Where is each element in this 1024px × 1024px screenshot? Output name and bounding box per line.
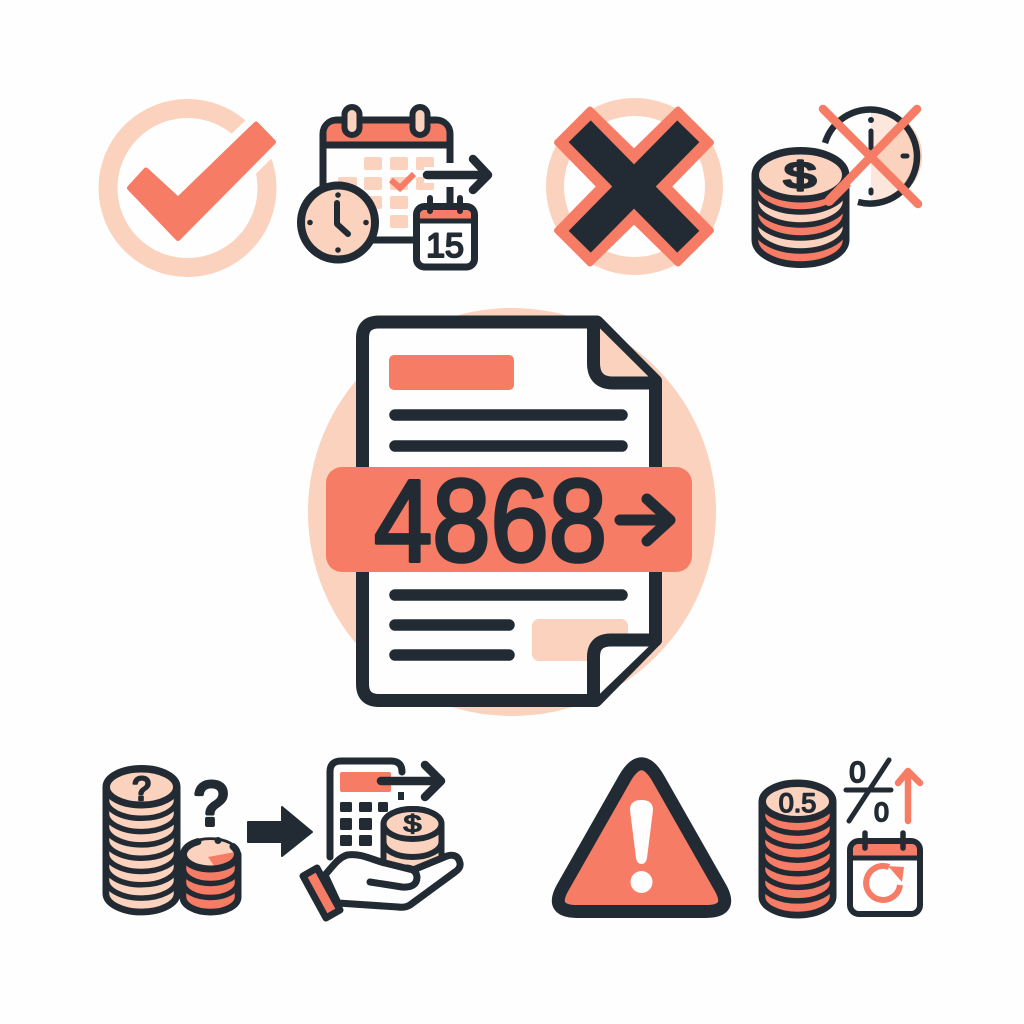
pale signature box xyxy=(532,619,628,661)
icon: calendar with clock and due date xyxy=(301,107,488,267)
document title bar xyxy=(389,355,514,390)
coin stack with dollar xyxy=(756,151,846,264)
icon: percent sign: 0 xyxy=(874,797,889,827)
coin stack with dollar: $ xyxy=(784,155,816,196)
central panel: form 4868 document xyxy=(308,308,716,716)
icon: calculator, coins and open hand xyxy=(303,761,460,918)
small calendar showing 15 xyxy=(416,198,474,267)
arrow pointing right xyxy=(424,159,488,190)
open hand xyxy=(325,855,460,907)
coral cuff xyxy=(303,868,340,918)
icon: calendar with refresh symbol xyxy=(850,833,920,914)
hand-held coins xyxy=(384,809,442,875)
short coin stack xyxy=(183,837,238,912)
lower text lines xyxy=(395,595,622,655)
document page xyxy=(362,322,656,700)
icon: percent sign: 0 xyxy=(849,757,866,789)
bottom page fold xyxy=(594,640,656,700)
tall coin stack: ? xyxy=(132,770,151,807)
icon: 0.5 percent coin stack xyxy=(762,784,832,914)
pale background circle xyxy=(308,308,716,716)
upper text lines xyxy=(395,415,622,446)
band arrow xyxy=(620,499,670,541)
icon: X mark in ring xyxy=(555,107,714,266)
date number: 15 xyxy=(426,227,464,265)
form number: 4868 xyxy=(374,455,607,586)
exclamation mark xyxy=(630,800,653,893)
icon: coins and crossed-out clock xyxy=(756,109,922,264)
icon: check mark in ring xyxy=(108,108,274,268)
calculator xyxy=(330,761,441,857)
hand-held coins: $ xyxy=(404,811,422,838)
icon: percent sign xyxy=(846,757,891,827)
crossed clock xyxy=(825,110,922,204)
clock xyxy=(301,186,375,260)
cross strokes xyxy=(823,109,918,206)
coral number band xyxy=(326,467,692,572)
arrow: rising rate xyxy=(898,771,920,821)
icon: warning triangle xyxy=(558,764,725,912)
icon: unknown coin stacks xyxy=(106,769,238,912)
tall coin stack xyxy=(106,769,176,911)
calendar body xyxy=(323,107,450,240)
arrow: solid block arrow xyxy=(248,807,312,856)
icon: 0.5 percent coin stack: 0.5 xyxy=(779,788,816,818)
large question mark: ? xyxy=(194,770,228,839)
